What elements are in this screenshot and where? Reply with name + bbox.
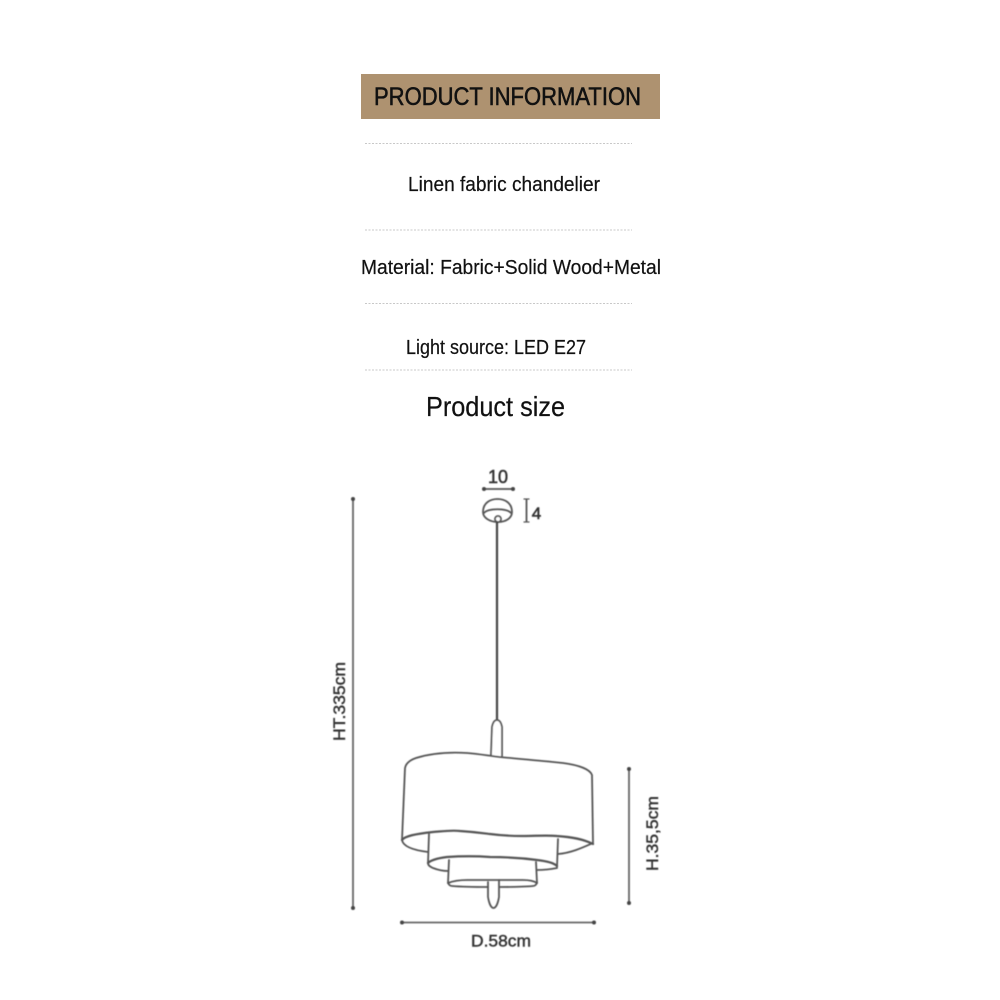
upper wooden finial xyxy=(491,720,502,756)
hanging cord xyxy=(496,522,498,721)
dimension: canopy height 4: 4 xyxy=(532,504,541,523)
dimension: diameter D.58cm xyxy=(400,920,596,950)
dimension: overall height HT.335cm xyxy=(330,497,355,910)
pendant lamp drawing xyxy=(402,499,593,908)
dimension: shade height H.35,5cm: H.35,5cm xyxy=(643,796,662,871)
dimension: canopy width 10: 10 xyxy=(488,467,508,487)
text: light source: Light source: LED E27 xyxy=(406,337,586,359)
bottom finial xyxy=(488,880,499,908)
heading banner: product information xyxy=(361,74,660,119)
dimension: overall height HT.335cm: HT.335cm xyxy=(330,662,349,741)
ceiling canopy xyxy=(483,499,512,522)
dimension: canopy height 4 xyxy=(524,499,541,523)
text: product name: Linen fabric chandelier xyxy=(408,174,600,196)
middle tier xyxy=(428,834,558,871)
dimension: shade height H.35,5cm xyxy=(627,767,662,905)
lower tier xyxy=(448,860,537,887)
dimension: diameter D.58cm: D.58cm xyxy=(471,932,531,950)
heading: product size: Product size xyxy=(426,391,565,422)
large shade xyxy=(402,753,593,854)
dimension: canopy width 10 xyxy=(482,467,515,491)
text: material: Material: Fabric+Solid Wood+Metal xyxy=(361,257,661,279)
heading banner: product information: PRODUCT INFORMATION xyxy=(374,83,641,111)
